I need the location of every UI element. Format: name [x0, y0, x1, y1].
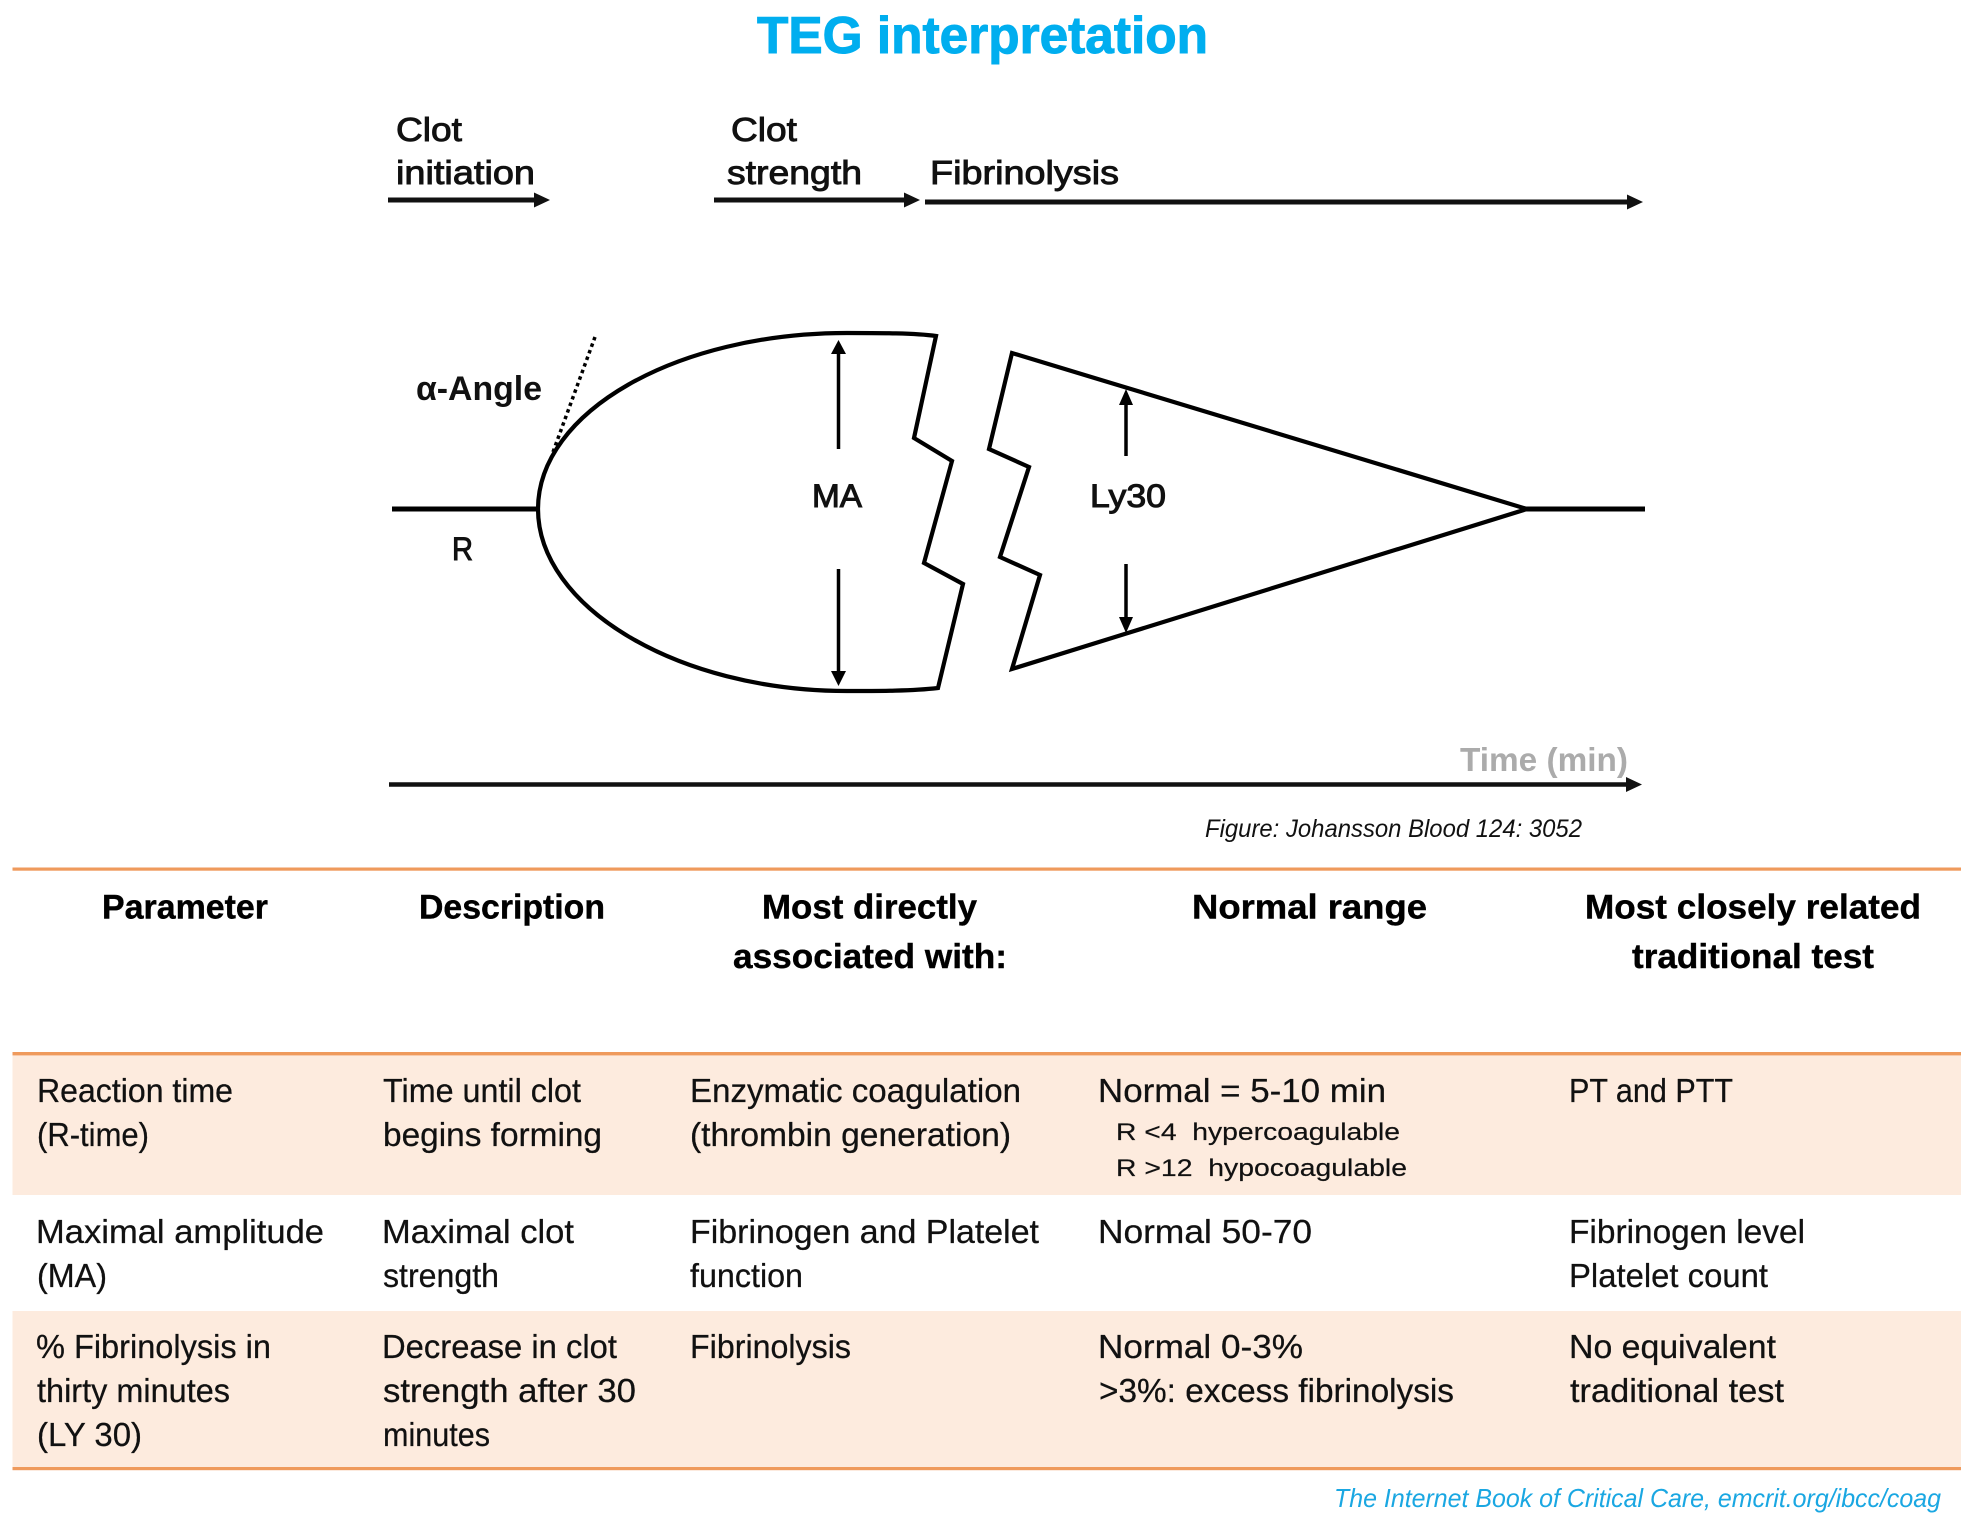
traditional test: reaction time: PT and PTT — [1569, 1072, 1733, 1109]
parameter: maximal amplitude — [36, 1213, 324, 1294]
normal range: LY30: >3%: excess fibrinolysis — [1099, 1372, 1454, 1409]
association: reaction time: (thrombin generation) — [690, 1116, 1011, 1153]
normal range: reaction time: R <4 hypercoagulable — [1116, 1119, 1400, 1146]
description: LY30: strength after 30 — [383, 1372, 636, 1409]
description: LY30 — [382, 1328, 636, 1453]
normal range: reaction time: R >12 hypocoagulable — [1116, 1155, 1407, 1182]
source credit: The Internet Book of Critical Care, emcrit.org/ibcc/coag — [1334, 1483, 1942, 1513]
parameter: reaction time — [37, 1072, 233, 1153]
description: maximal amplitude: strength — [383, 1257, 499, 1294]
description: reaction time: Time until clot — [383, 1072, 581, 1109]
parameter: maximal amplitude: Maximal amplitude — [36, 1213, 324, 1250]
label: clot initiation — [396, 111, 535, 191]
label: clot initiation: Clot — [396, 111, 462, 148]
parameter: LY30: (LY 30) — [37, 1416, 142, 1453]
panel: TEG diagram — [388, 111, 1645, 843]
label: clot strength: strength — [727, 154, 862, 191]
header: most directly associated with — [733, 888, 1007, 976]
row backgrounds — [12, 868, 1961, 1470]
row: fibrinolysis in thirty minutes — [36, 1328, 1784, 1453]
parameter: LY30: % Fibrinolysis in — [36, 1328, 271, 1365]
association: reaction time: Enzymatic coagulation — [690, 1072, 1021, 1109]
arrow: clot initiation — [388, 192, 550, 208]
parameter: reaction time: (R-time) — [37, 1116, 149, 1153]
row: reaction time — [37, 1072, 1733, 1182]
normal range: reaction time — [1098, 1072, 1407, 1182]
header: description: Description — [419, 888, 605, 926]
description: LY30: Decrease in clot — [382, 1328, 617, 1365]
header: most closely related traditional test: traditional test — [1632, 938, 1874, 976]
normal range: reaction time: Normal = 5-10 min — [1098, 1072, 1386, 1109]
header: most closely related traditional test — [1585, 888, 1921, 976]
parameter: maximal amplitude: (MA) — [37, 1257, 107, 1294]
label: time axis: Time (min) — [1460, 741, 1628, 778]
label: clot strength: Clot — [731, 111, 797, 148]
arrow: MA down — [831, 569, 846, 686]
arrow: MA up — [831, 340, 846, 449]
parameter: LY30 — [36, 1328, 271, 1453]
association: maximal amplitude: function — [690, 1257, 803, 1294]
label: clot strength — [727, 111, 862, 191]
description: reaction time — [383, 1072, 602, 1153]
description: maximal amplitude — [382, 1213, 574, 1294]
title: TEG interpretation — [757, 7, 1208, 65]
association: maximal amplitude — [690, 1213, 1039, 1294]
arrow: fibrinolysis — [925, 194, 1643, 210]
traditional test: maximal amplitude: Platelet count — [1569, 1257, 1768, 1294]
arrow: Ly30 down — [1119, 564, 1133, 633]
description: LY30: minutes — [383, 1416, 490, 1453]
traditional test: maximal amplitude: Fibrinogen level — [1569, 1213, 1805, 1250]
header: most directly associated with: associated with: — [733, 938, 1007, 976]
traditional test: LY30 — [1569, 1328, 1784, 1409]
label: fibrinolysis: Fibrinolysis — [930, 154, 1119, 191]
table header row — [102, 888, 1921, 976]
parameter: LY30: thirty minutes — [37, 1372, 230, 1409]
label: clot initiation: initiation — [396, 154, 535, 191]
description: reaction time: begins forming — [383, 1116, 602, 1153]
curve: fibrinolysis taper with break — [989, 353, 1527, 669]
label: alpha angle: α-Angle — [416, 370, 542, 408]
arrow: clot strength — [714, 192, 920, 208]
association: LY30: Fibrinolysis — [690, 1328, 851, 1365]
traditional test: LY30: No equivalent — [1569, 1328, 1776, 1365]
header: most closely related traditional test: Most closely related — [1585, 888, 1921, 926]
label: Ly30: Ly30 — [1090, 478, 1166, 514]
association: reaction time — [690, 1072, 1021, 1153]
curve: baseline R segment — [392, 506, 540, 512]
label: MA: MA — [812, 478, 863, 514]
label: R: R — [452, 531, 473, 567]
normal range: LY30: Normal 0-3% — [1098, 1328, 1303, 1365]
parameter: reaction time: Reaction time — [37, 1072, 233, 1109]
figure citation: Figure: Johansson Blood 124: 3052 — [1205, 815, 1582, 843]
normal range: LY30 — [1098, 1328, 1454, 1409]
traditional test: LY30: traditional test — [1570, 1372, 1784, 1409]
header: most directly associated with: Most directly — [762, 888, 977, 926]
curve: baseline after lysis — [1525, 506, 1645, 512]
traditional test: maximal amplitude — [1569, 1213, 1805, 1294]
line: alpha angle tangent — [553, 337, 595, 452]
header: parameter: Parameter — [102, 888, 268, 926]
arrow: time axis — [389, 777, 1642, 792]
row: maximal amplitude — [36, 1213, 1805, 1294]
description: maximal amplitude: Maximal clot — [382, 1213, 574, 1250]
arrow: Ly30 up — [1119, 389, 1133, 456]
curve: clot formation upper and lower amplitude with break — [538, 333, 963, 691]
table: TEG parameters — [12, 868, 1961, 1470]
header: normal range: Normal range — [1192, 888, 1427, 926]
association: maximal amplitude: Fibrinogen and Platelet — [690, 1213, 1039, 1250]
normal range: maximal amplitude: Normal 50-70 — [1098, 1213, 1312, 1250]
